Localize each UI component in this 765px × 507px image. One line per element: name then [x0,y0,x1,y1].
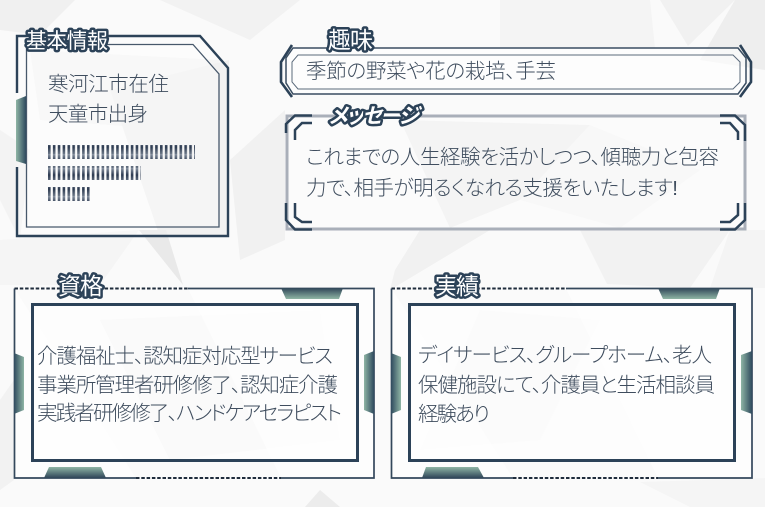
panel frame: message [286,116,745,230]
text: qualifications: 実践者研修修了、ハンドケアセラピスト [37,402,342,425]
text: qualifications: 介護福祉士、認知症対応型サービス [37,345,333,368]
text: track record: 保健施設にて、介護員と生活相談員 [418,374,715,397]
text: qualifications: 事業所管理者研修修了、認知症介護 [37,374,338,397]
panel: track record [391,273,752,478]
heading: qualifications: 資格 [58,273,103,299]
text: track record: デイサービス、グループホーム、老人 [418,344,712,367]
heading: basic info: 基本情報 [26,30,108,53]
text: message: これまでの人生経験を活かしつつ、傾聴力と包容 [306,146,719,169]
panel frame: track record [391,288,752,478]
panel frame: basic info [16,36,228,236]
panel: basic info [16,30,228,236]
heading: hobbies: 趣味 [328,27,373,53]
heading: message: メッセージ [329,105,422,128]
panel frame: hobbies [281,45,751,97]
text: hobbies: 季節の野菜や花の栽培、手芸 [306,60,556,83]
panel: hobbies [281,27,751,97]
panel: message [286,105,745,230]
panel: qualifications [14,273,374,478]
text: birthplace: 天童市出身 [48,103,148,126]
text: track record [418,344,715,426]
heading: track record: 実績 [435,273,479,299]
text: qualifications [37,345,342,425]
redaction bars [48,145,195,201]
text: message [306,146,719,200]
text: message: 力で、相手が明るくなれる支援をいたします! [306,177,678,200]
text: residence: 寒河江市在住 [48,73,169,96]
text: track record: 経験あり [418,403,490,426]
panel frame: qualifications [14,288,374,478]
